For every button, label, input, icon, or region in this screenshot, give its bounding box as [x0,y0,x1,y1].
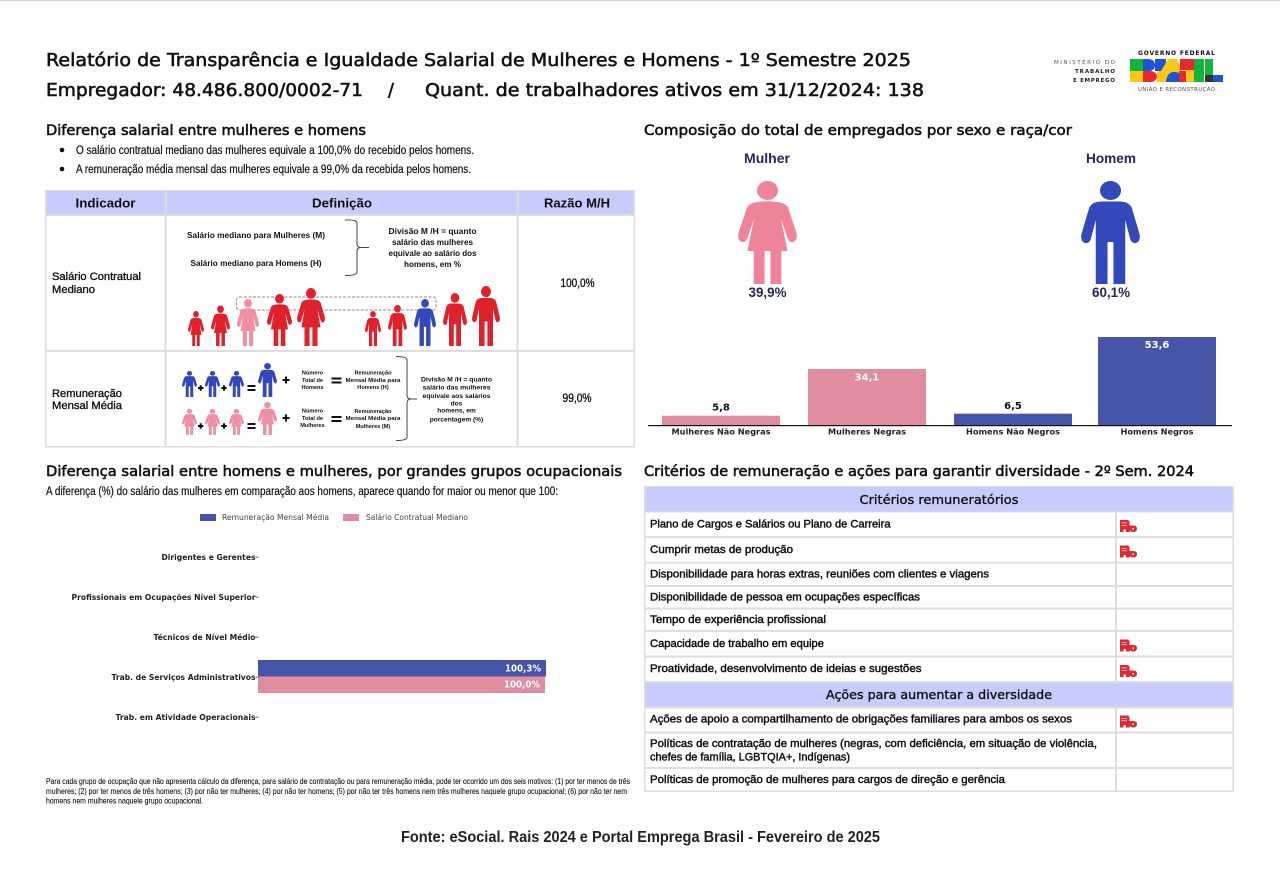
figure: mulher 39,9%: Mulher [744,150,791,166]
bullet list [60,145,474,176]
footnote [46,777,630,806]
definition: divisão M/H mediano [388,227,477,269]
figure: homem 60,1%: Homem [1086,150,1136,166]
bar chart: grupos ocupacionais: 100,3% [505,664,541,674]
icons: soma homens [182,363,277,397]
section header: critérios remuneratórios: Critérios remuneratórios [860,492,1018,507]
definition: divisão M/H mediano: salário das mulheres [392,238,474,247]
bar chart: composição por sexo e raça: 6,5 [1004,401,1022,412]
row label: salário contratual mediano [52,271,141,296]
definition: divisão M/H remuneração: dos [451,400,463,408]
row label: remuneração mensal média: Remuneração [52,388,122,400]
definition: salário mediano texts: Salário mediano para Homens (H) [190,259,322,268]
title: / [388,81,394,101]
definition: divisão M/H remuneração: Divisão M /H = quanto [421,376,492,384]
criteria text rows [650,518,1097,786]
row label: salário contratual mediano: Mediano [52,284,95,296]
criteria text rows: Ações de apoio a compartilhamento de obrigações familiares para ambos os sexos [650,714,1073,726]
footnote: mulheres; (2) por ter menos de três homens; (3) por não ter mulheres; (4) por não ter homens; (5) por não ter três homens nem três mulheres naquele grupo ocupacional; (6) por não ter nem [46,787,627,796]
text: remuneração média homens [346,370,401,391]
criteria text rows: Capacidade de trabalho em equipe [650,638,824,650]
footnote: Para cada grupo de ocupação que não apresenta cálculo da diferença, para salário de contratação ou para remuneração média, pode ter ocorrido um dos seis motivos: (1) por ter menos de três [46,777,630,786]
legend: Remuneração Mensal Média [222,512,329,522]
bar chart: grupos ocupacionais: Dirigentes e Gerentes [162,553,256,562]
definition: divisão M/H remuneração: homens, em [437,408,476,414]
title [46,51,924,101]
logo: ministério do trabalho e emprego: E EMPREGO [1073,78,1115,84]
section header: ações: Ações para aumentar a diversidade [826,687,1052,702]
text: número total de homens: Total de [302,378,323,384]
text: número total de homens: Homens [301,385,324,391]
bracket: remuneração [396,356,417,440]
bullet list: O salário contratual mediano das mulheres equivale a 100,0% do recebido pelos homens. [76,145,474,157]
definition: salário mediano texts: Salário mediano para Mulheres (M) [187,231,325,240]
legend: Salário Contratual Mediano [366,513,468,522]
table headers: Razão M/H [544,196,610,210]
criteria text rows: Políticas de contratação de mulheres (negras, com deficiência, em situação de violência, [650,738,1097,750]
row label: remuneração mensal média [52,388,123,412]
text: número total de mulheres: Número [302,408,324,414]
definition: divisão M/H remuneração: salário das mulheres [422,384,491,392]
bar chart: composição por sexo e raça [648,337,1232,436]
logo: governo federal brasil: UNIÃO E RECONSTRUÇÃO [1138,86,1215,93]
table headers: Definição [312,196,372,210]
title: Empregador: 48.486.800/0002-71 [46,81,363,101]
operators [198,376,342,429]
criteria text rows: Disponibilidade para horas extras, reuniões com clientes e viagens [650,568,990,580]
panel: critérios e ações [644,486,1234,792]
criteria text rows: Tempo de experiência profissional [650,614,826,626]
title: Quant. de trabalhadores ativos em 31/12/2024: 138 [425,81,924,101]
bar chart: grupos ocupacionais: Trab. em Atividade Operacionais [116,713,256,722]
criteria text rows: chefes de família, LGBTQIA+, Indígenas) [650,752,850,764]
figure: homem 60,1% [1081,150,1140,300]
heading: critérios: Critérios de remuneração e ações para garantir diversidade - 2º Sem. 2024 [644,464,1194,480]
bar chart: grupos ocupacionais: Profissionais em Ocupações Nível Superior [72,593,256,602]
bar chart: composição por sexo e raça: Homens Negros [1120,428,1194,436]
legend [200,512,468,522]
icons: soma mulheres [182,402,277,435]
razão value 100,0%: 100,0% [560,278,594,290]
heading: diferença salarial: Diferença salarial entre mulheres e homens [46,123,366,139]
figure: mulher 39,9%: 39,9% [748,284,787,300]
definition: salário mediano texts [187,231,325,268]
bar chart: composição por sexo e raça: 53,6 [1145,340,1169,351]
icons: homens ordenados por salário [365,286,500,346]
panel: tabela indicador definição razão [45,190,635,448]
bar chart: grupos ocupacionais [72,553,546,722]
subheading: diferença: A diferença (%) do salário das mulheres em comparação aos homens, aparece quando for maior ou menor que 100: [46,486,558,498]
row label: remuneração mensal média: Mensal Média [52,400,123,412]
heading: grupos ocupacionais: Diferença salarial entre homens e mulheres, por grandes grupos ocupacionais [46,464,622,480]
icons: critérios marcados [1120,520,1137,728]
figure: mulher 39,9% [738,150,797,300]
logo: ministério do trabalho e emprego [1054,58,1116,84]
text: número total de mulheres: Mulheres [300,423,325,429]
logo: governo federal brasil: GOVERNO FEDERAL [1138,50,1215,57]
dashed median highlight [236,297,436,310]
text: número total de mulheres: Total de [302,416,323,422]
definition: divisão M/H mediano: Divisão M /H = quanto [388,227,477,236]
criteria text rows: Disponibilidade de pessoa em ocupações específicas [650,592,921,604]
figure: homem 60,1%: 60,1% [1092,284,1131,300]
definition: divisão M/H mediano: homens, em % [404,260,461,269]
definition: divisão M/H remuneração: porcentagem (%) [430,416,483,424]
section header: critérios remuneratórios [646,487,1232,512]
text: número total de mulheres [300,408,325,429]
criteria text rows: Plano de Cargos e Salários ou Plano de Carreira [650,518,891,530]
logo: governo federal brasil [1130,50,1223,93]
definition: divisão M/H remuneração: equivale aos salários [422,393,491,400]
table headers: Indicador [76,196,136,210]
icons: mulheres ordenadas por salário [188,288,325,346]
logo: ministério do trabalho e emprego: TRABALHO [1075,69,1115,75]
bullet list: A remuneração média mensal das mulheres equivale a 99,0% da recebida pelos homens. [76,164,471,176]
definition: divisão M/H remuneração [421,376,492,424]
heading: composição: Composição do total de empregados por sexo e raça/cor [644,123,1072,139]
footnote: homens nem mulheres naquele grupo ocupacional. [46,796,203,806]
razão value 99,0%: 99,0% [562,393,592,405]
row label: salário contratual mediano: Salário Contratual [52,271,141,283]
criteria text rows: Políticas de promoção de mulheres para cargos de direção e gerência [650,774,1006,786]
bar chart: composição por sexo e raça: 5,8 [712,402,730,414]
bar chart: composição por sexo e raça: Mulheres Não Negras [672,428,771,436]
text: número total de homens: Número [302,370,324,376]
bar chart: composição por sexo e raça: Mulheres Negras [828,428,907,436]
text: número total de homens [301,370,324,391]
section header: ações [646,683,1232,706]
title: Relatório de Transparência e Igualdade Salarial de Mulheres e Homens - 1º Semestre 2025 [46,51,911,71]
text: remuneração média mulheres [346,409,401,430]
source line: Fonte: eSocial. Rais 2024 e Portal Emprega Brasil - Fevereiro de 2025 [401,829,880,846]
criteria text rows: Proatividade, desenvolvimento de ideias e sugestões [650,663,922,675]
bar chart: composição por sexo e raça: Homens Não Negros [966,428,1061,436]
text: remuneração média mulheres: Mulheres (M) [356,424,390,430]
text: remuneração média mulheres: Remuneração [354,409,392,415]
bar chart: grupos ocupacionais: Trab. de Serviços Administrativos [112,673,256,682]
text: remuneração média mulheres: Mensal Média para [346,416,401,422]
logo: ministério do trabalho e emprego: MINISTÉRIO DO [1054,58,1116,66]
bar chart: grupos ocupacionais: Técnicos de Nível Médio [154,633,256,642]
bracket: mediano [345,220,369,276]
table headers [76,196,610,210]
text: remuneração média homens: Homens (H) [357,385,389,391]
criteria text rows: Cumprir metas de produção [650,544,793,556]
text: remuneração média homens: Remuneração [354,370,392,376]
bar chart: grupos ocupacionais: 100,0% [504,680,540,690]
text: remuneração média homens: Mensal Média para [346,378,401,384]
definition: divisão M/H mediano: equivale ao salário dos [388,249,477,258]
bar chart: composição por sexo e raça: 34,1 [855,372,879,384]
